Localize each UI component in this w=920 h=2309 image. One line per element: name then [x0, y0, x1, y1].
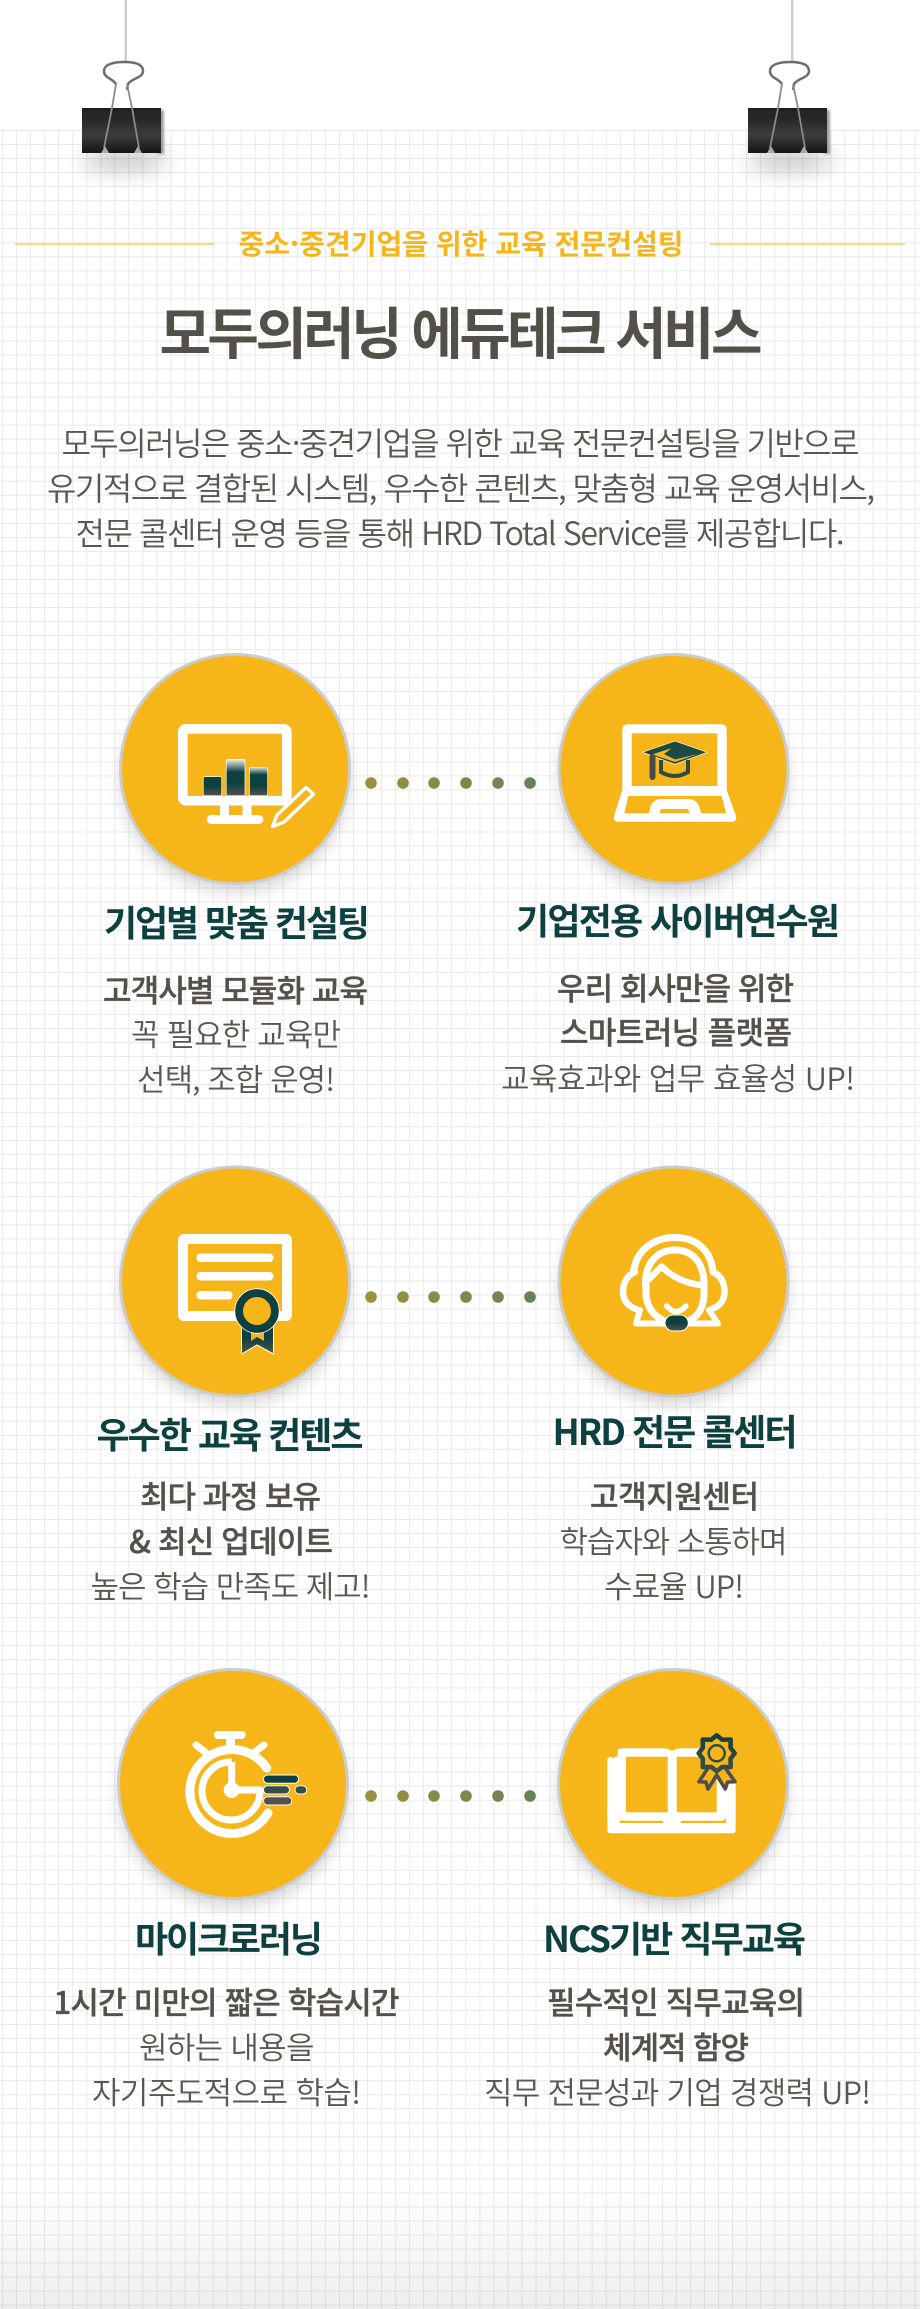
- description: [484, 1978, 871, 2113]
- description: [90, 1472, 370, 1607]
- description: 직무 전문성과 기업 경쟁력 UP!: [484, 2068, 871, 2113]
- icon: certificate with ribbon: [183, 1239, 287, 1354]
- description: 선택, 조합 운영!: [137, 1055, 335, 1100]
- heading: 기업별 맞춤 컨설팅: [104, 895, 370, 947]
- description: 최다 과정 보유: [140, 1472, 321, 1517]
- description: [501, 964, 855, 1099]
- description: [103, 966, 368, 1100]
- description: 체계적 함양: [603, 2023, 749, 2068]
- intro paragraph: 모두의러닝은 중소·중견기업을 위한 교육 전문컨설팅을 기반으로: [62, 419, 860, 465]
- icon: headset agent: [623, 1238, 724, 1331]
- kicker with side rules: 중소·중견기업을 위한 교육 전문컨설팅: [238, 223, 684, 263]
- panel: 우수한 교육 컨텐츠: [90, 1167, 370, 1607]
- icon: laptop with graduation cap: [614, 724, 736, 822]
- title: 모두의러닝 에듀테크 서비스: [160, 290, 762, 371]
- icon: stopwatch with speed lines: [190, 1731, 307, 1834]
- intro paragraph: [47, 419, 875, 555]
- panel: NCS기반 직무교육: [484, 1670, 871, 2113]
- panel: 기업전용 사이버연수원: [501, 654, 855, 1099]
- binder clip left: [81, 0, 169, 171]
- intro paragraph: 유기적으로 결합된 시스템, 우수한 콘텐츠, 맞춤형 교육 운영서비스,: [47, 464, 875, 510]
- description: 1시간 미만의 짧은 학습시간: [54, 1978, 400, 2023]
- dotted connector row 2: [365, 1291, 536, 1303]
- description: 수료율 UP!: [604, 1562, 744, 1607]
- intro paragraph: 전문 콜센터 운영 등을 통해 HRD Total Service를 제공합니다.: [76, 509, 844, 555]
- heading: NCS기반 직무교육: [543, 1911, 806, 1963]
- description: 고객사별 모듈화 교육: [103, 966, 368, 1011]
- description: 높은 학습 만족도 제고!: [90, 1562, 370, 1607]
- description: 꼭 필요한 교육만: [131, 1010, 341, 1055]
- description: 원하는 내용을: [139, 2023, 314, 2068]
- description: 필수적인 직무교육의: [547, 1978, 805, 2023]
- icon: open book with medal: [607, 1735, 736, 1833]
- circle badge: [559, 1167, 788, 1396]
- circle badge: [120, 1167, 350, 1396]
- panel: 마이크로러닝: [54, 1670, 400, 2113]
- panel: 기업별 맞춤 컨설팅: [103, 654, 370, 1100]
- circle badge: [559, 654, 788, 884]
- icon: monitor with chart and pencil: [183, 729, 314, 826]
- dotted connector row 3: [365, 1790, 536, 1802]
- description: 학습자와 소통하며: [560, 1517, 788, 1562]
- description: 자기주도적으로 학습!: [92, 2068, 361, 2113]
- heading: 우수한 교육 컨텐츠: [96, 1407, 364, 1459]
- panel: HRD 전문 콜센터: [552, 1167, 798, 1607]
- circle badge: [118, 1670, 348, 1898]
- binder clip right: [747, 0, 835, 171]
- description: 고객지원센터: [590, 1472, 759, 1517]
- heading: 기업전용 사이버연수원: [516, 893, 840, 945]
- circle badge: [558, 1670, 788, 1898]
- description: [560, 1472, 788, 1607]
- description: 교육효과와 업무 효율성 UP!: [501, 1054, 855, 1099]
- heading: HRD 전문 콜센터: [552, 1404, 798, 1456]
- description: 스마트러닝 플랫폼: [560, 1008, 792, 1053]
- description: [54, 1978, 400, 2113]
- circle badge: [120, 654, 350, 884]
- dotted connector row 1: [365, 777, 536, 789]
- description: 우리 회사만을 위한: [557, 964, 794, 1009]
- heading: 마이크로러닝: [135, 1911, 323, 1963]
- description: & 최신 업데이트: [129, 1517, 333, 1562]
